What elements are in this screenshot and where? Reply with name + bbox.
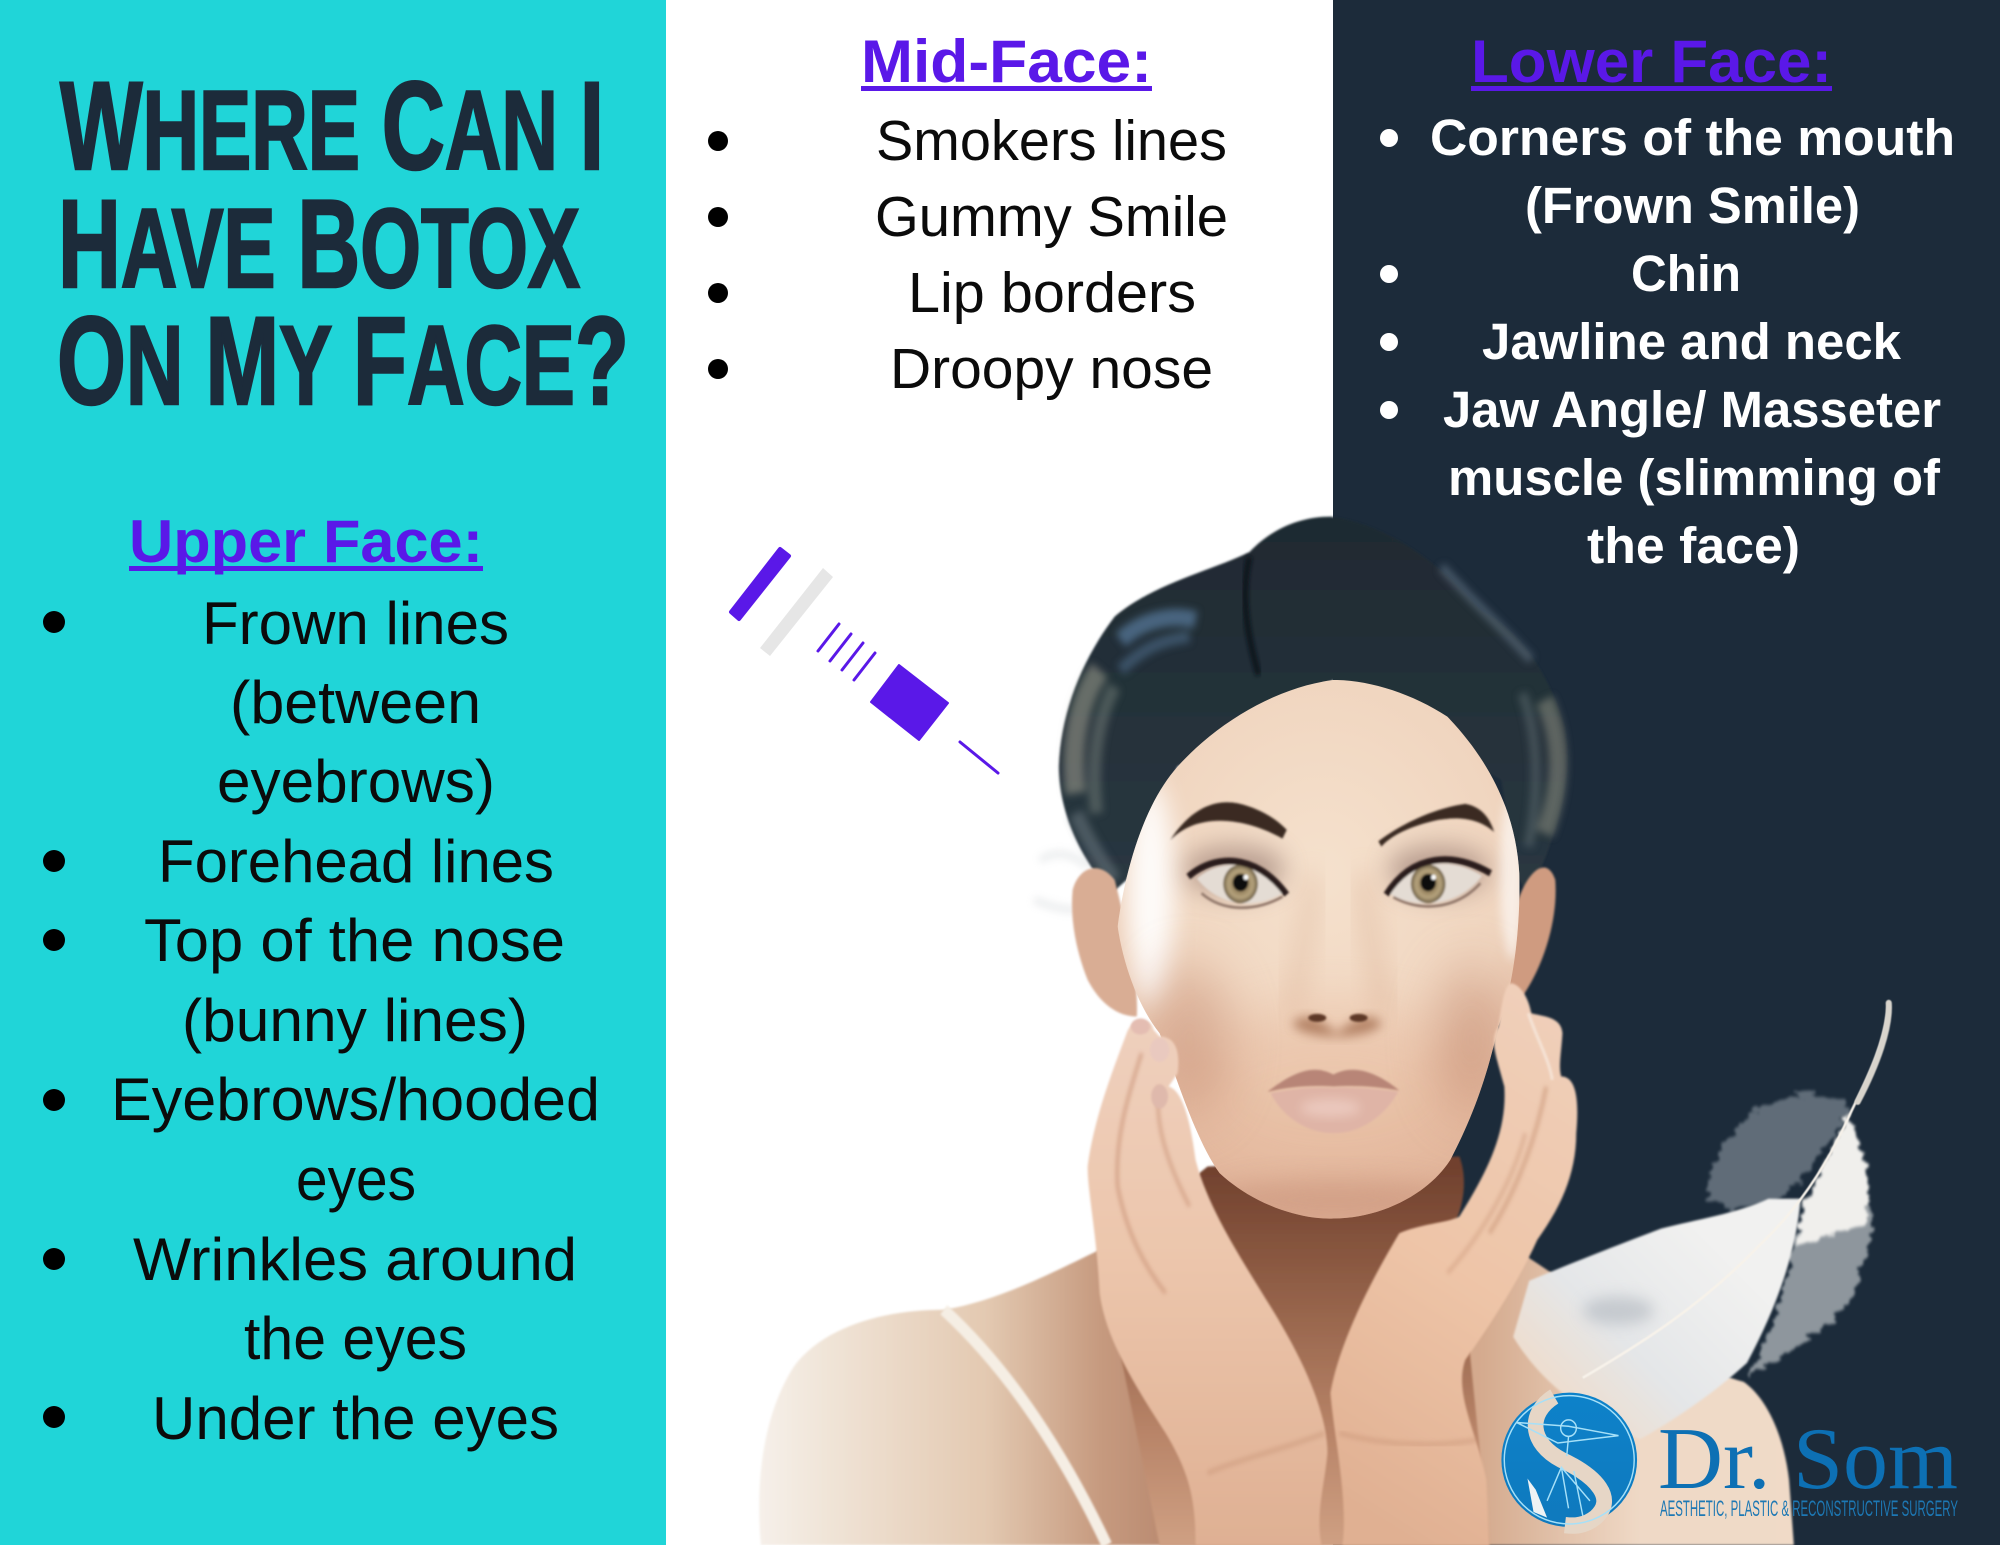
background: white centre panel (666, 0, 1333, 1545)
list: lower face treatment areas: Corners of the mouth (1430, 109, 1955, 166)
list: mid-face treatment areas: Droopy nose (890, 337, 1213, 401)
right hand (1330, 983, 1577, 1545)
heading: Lower Face: Lower Face: (1471, 28, 1832, 95)
eye shadow (1184, 846, 1285, 894)
icon: syringe (731, 549, 998, 773)
photo: woman's hands (1088, 983, 1577, 1545)
panel: upper face (teal) (0, 0, 666, 1545)
lips (1268, 1070, 1399, 1133)
list: mid-face treatment areas: Smokers lines (876, 109, 1227, 173)
eyes (1188, 860, 1491, 908)
ears (1072, 868, 1556, 1017)
list: lower face treatment areas: muscle (slimming of (1448, 449, 1941, 506)
title: ON MY FACE? (57, 292, 629, 431)
logo: Dr. Som emblem (1501, 1393, 1637, 1527)
list: lower face treatment areas: Jaw Angle/ Masseter (1443, 381, 1941, 438)
list: upper face treatment areas: the eyes (244, 1305, 467, 1372)
nose shading (1291, 873, 1312, 1013)
heading: Mid-Face: Mid-Face: (861, 28, 1152, 95)
title: WHERE CAN I (60, 57, 604, 196)
logo: Dr. Som wordmark: Dr. Som (1658, 1411, 1958, 1508)
heading: Upper Face: Upper Face: (129, 508, 483, 575)
list: mid-face treatment areas: Gummy Smile (875, 185, 1228, 249)
list: upper face treatment areas: Frown lines (202, 590, 509, 657)
list: lower face treatment areas: Jawline and neck (1482, 313, 1902, 370)
list: upper face treatment areas: Wrinkles around (133, 1226, 577, 1293)
illustration: white feather (1513, 1003, 1889, 1439)
list: upper face treatment areas: eyes (296, 1146, 416, 1213)
list: mid-face treatment areas (708, 109, 1228, 401)
left hand (1088, 1019, 1327, 1545)
list: mid-face treatment areas: Lip borders (908, 261, 1196, 325)
list: upper face treatment areas: Forehead lines (158, 828, 554, 895)
left-side hair wisps (1034, 854, 1088, 910)
list: lower face treatment areas: Chin (1631, 245, 1741, 302)
list: lower face treatment areas (1380, 109, 1955, 574)
list: upper face treatment areas: (bunny lines) (182, 987, 528, 1054)
background: dark right panel (1333, 0, 2000, 1545)
list: upper face treatment areas: Eyebrows/hooded (111, 1066, 600, 1133)
title: HAVE BOTOX (58, 175, 580, 314)
list: upper face treatment areas: eyebrows) (217, 748, 495, 815)
eyebrows (1170, 802, 1494, 847)
list: upper face treatment areas: Under the eyes (152, 1385, 559, 1452)
list: upper face treatment areas: (between (230, 669, 481, 736)
title (57, 57, 629, 431)
list: upper face treatment areas: Top of the nose (144, 907, 565, 974)
list: lower face treatment areas: (Frown Smile) (1525, 177, 1860, 234)
hair (1059, 517, 1567, 897)
face (1118, 680, 1520, 1219)
photo: woman's head (1034, 517, 1567, 1233)
list: lower face treatment areas: the face) (1587, 517, 1800, 574)
list: upper face treatment areas (43, 590, 600, 1452)
photo: shoulders and neck (759, 1157, 1794, 1545)
